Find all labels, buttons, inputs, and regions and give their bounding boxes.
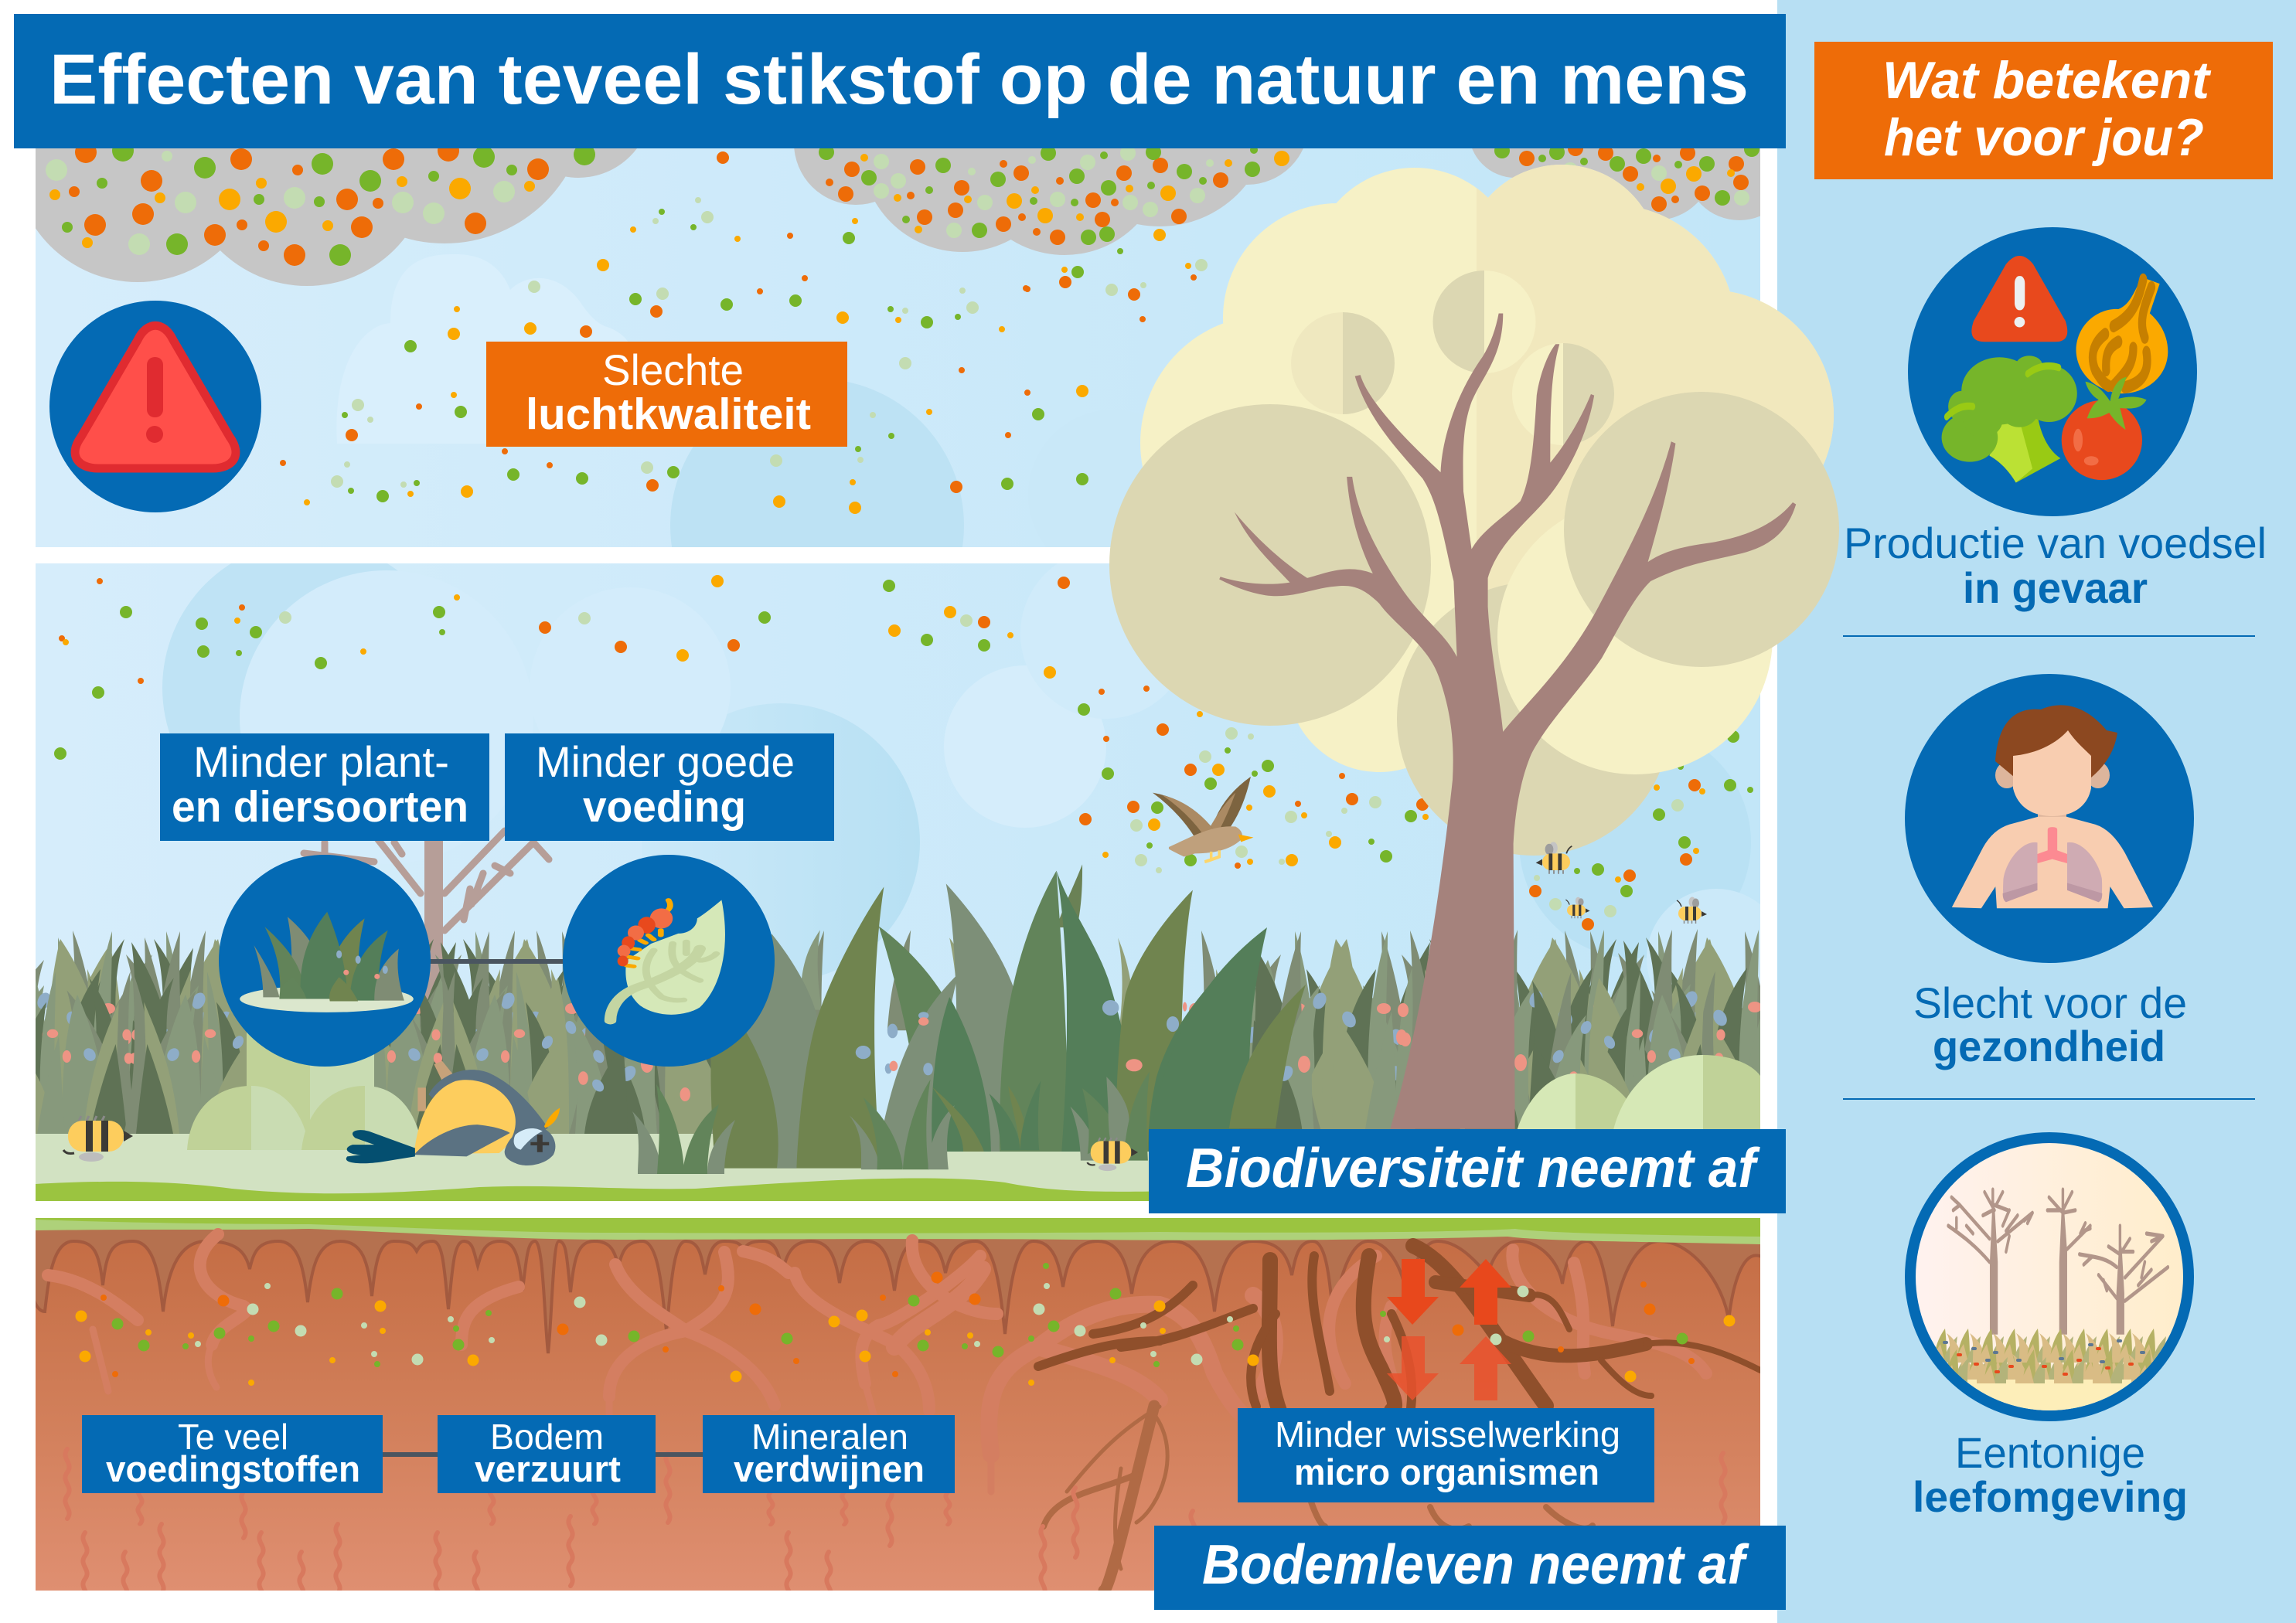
label: mineralen verdwijnen: [703, 1415, 955, 1493]
pollution particles in right clouds: [826, 148, 1752, 237]
label: minder wisselwerking micro organismen: micro organismen: [1294, 1451, 1599, 1492]
connector between circles: [429, 959, 565, 964]
label: minder plant- en diersoorten: en diersoorten: [172, 782, 468, 832]
icon: eaten leaf with caterpillar: [563, 855, 775, 1067]
text: slecht voor de gezondheid: gezondheid: [1933, 1022, 2165, 1070]
label: slechte luchtkwaliteit: Slechte: [602, 345, 744, 394]
arrows: interaction down and up: [1387, 1259, 1511, 1400]
label: minder goede voeding: [505, 733, 834, 841]
air particles: [60, 581, 1750, 924]
ground: [36, 1134, 1149, 1201]
label: te veel voedingstoffen: Te veel: [178, 1417, 288, 1457]
background clouds: [162, 563, 1760, 1005]
label: bodem verzuurt: verzuurt: [475, 1448, 621, 1489]
icon: person with lungs: [1905, 674, 2194, 963]
panel: soil scene: [31, 1218, 1766, 1621]
pollution particles in left cloud: [55, 151, 584, 255]
text: eentonige leefomgeving: Eentonige: [1955, 1428, 2145, 1477]
illustration: large tree: [1109, 165, 1839, 1129]
sidebar heading: Wat betekent: [1882, 51, 2211, 110]
label: minder wisselwerking micro organismen: [1238, 1408, 1654, 1502]
label: te veel voedingstoffen: [82, 1415, 383, 1493]
text: slecht voor de gezondheid: Slecht voor de: [1913, 978, 2187, 1027]
falling particles in sky: [283, 158, 1201, 508]
bee on ground left: [63, 1116, 133, 1162]
dark roots of the tree: [1038, 1246, 1760, 1415]
label: minder plant- en diersoorten: [160, 733, 489, 841]
tree crown: [1109, 165, 1839, 856]
text: eentonige leefomgeving: leefomgeving: [1913, 1472, 2188, 1521]
label: mineralen verdwijnen: verdwijnen: [734, 1448, 925, 1489]
label: minder wisselwerking micro organismen: Minder wisselwerking: [1275, 1414, 1620, 1455]
soil particles: [81, 1266, 1729, 1383]
grey polluted clouds: [36, 148, 1760, 286]
light roots: [48, 1234, 1706, 1492]
sidebar heading: [1814, 42, 2273, 179]
background grass clumps: [0, 929, 1865, 1134]
label: slechte luchtkwaliteit: [486, 342, 847, 447]
label: bodem verzuurt: Bodem: [490, 1417, 604, 1457]
icon: food production at risk: [1908, 227, 2197, 516]
label: minder goede voeding: Minder goede: [536, 737, 795, 786]
tree trunk and branches: [1219, 313, 1796, 1129]
label: minder plant- en diersoorten: Minder plant-: [193, 737, 449, 786]
worms: [65, 1449, 1725, 1621]
panel: right sidebar background: [1777, 0, 2296, 1623]
dead bird: [346, 1061, 560, 1165]
sidebar heading: het voor jou?: [1884, 108, 2204, 167]
right large leaves: [1208, 927, 1306, 1128]
large central leaves: [710, 864, 1239, 1169]
connectors between soil labels: [379, 1452, 707, 1457]
title bar: [14, 14, 1786, 148]
label: bodemleven neemt af: [1154, 1526, 1786, 1610]
icon: grass habitat: [219, 855, 431, 1067]
icon: warning air quality: [49, 301, 261, 512]
distant bare tree: [304, 831, 549, 1005]
panel: biodiversity scene: [36, 563, 1760, 1201]
bushes in front of grass: [187, 1033, 1760, 1150]
foreground grass tufts: [632, 1084, 735, 1174]
title bar: Effecten van teveel stikstof op de natuur en mens: [49, 40, 1749, 119]
topsoil fingers: [31, 1221, 1766, 1353]
text: productie van voedsel in gevaar: Productie van voedsel: [1844, 519, 2267, 567]
bee on ground right: [1087, 1138, 1138, 1171]
green surface bands: [36, 1218, 1760, 1244]
text: eentonige leefomgeving: [1913, 1428, 2188, 1521]
label: bodem verzuurt: [438, 1415, 656, 1493]
icon: monotonous landscape: [1905, 1132, 2194, 1424]
label: biodiversiteit neemt af: [1149, 1129, 1786, 1213]
label: te veel voedingstoffen: voedingstoffen: [106, 1448, 360, 1489]
text: productie van voedsel in gevaar: [1844, 519, 2267, 612]
flying bees: [1536, 842, 1707, 924]
panel: air quality scene: [36, 148, 1760, 547]
label: mineralen verdwijnen: Mineralen: [751, 1417, 908, 1457]
text: productie van voedsel in gevaar: in gevaar: [1963, 563, 2148, 612]
label: bodemleven neemt af: Bodemleven neemt af: [1202, 1534, 1749, 1596]
text: slecht voor de gezondheid: [1913, 978, 2187, 1070]
label: biodiversiteit neemt af: Biodiversiteit neemt af: [1186, 1138, 1760, 1199]
label: slechte luchtkwaliteit: luchtkwaliteit: [526, 390, 811, 439]
label: minder goede voeding: voeding: [583, 782, 746, 832]
flying bird: [1153, 777, 1253, 862]
